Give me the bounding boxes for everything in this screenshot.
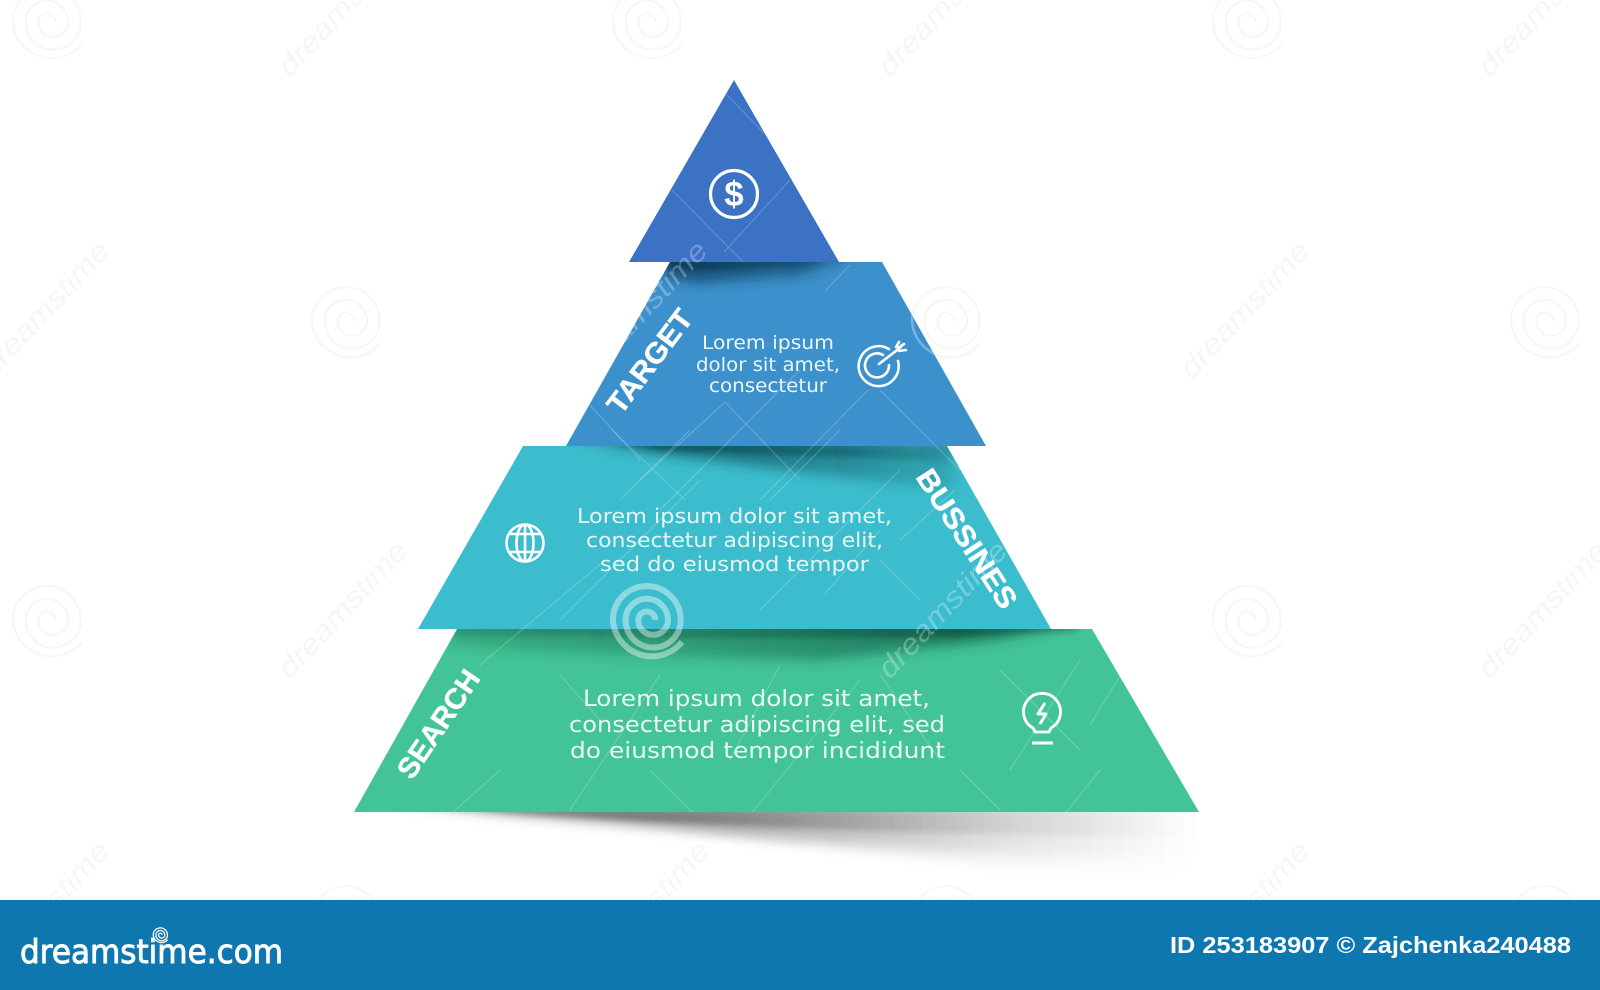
pyramid drop shadow: [420, 812, 1164, 862]
footer band: [0, 900, 1600, 990]
watermark overlay on pyramid: [450, 95, 1145, 820]
text: search tier copy: do eiusmod tempor incididunt: [570, 739, 945, 764]
watermark text: dreamstime: [272, 535, 414, 685]
panel: target tier: [566, 258, 986, 446]
label: bussines: BUSSINES: [909, 463, 1023, 615]
watermark text: dreamstime: [1174, 235, 1316, 385]
text: target tier copy: Lorem ipsum: [702, 332, 834, 354]
icon: dollar: [710, 170, 758, 218]
watermark overlay on pyramid: dreamstime: [872, 535, 1014, 685]
icon: target: [859, 342, 906, 386]
icon: globe: [506, 524, 544, 562]
watermark text: dreamstime: [1174, 835, 1316, 985]
text: target tier copy: dolor sit amet,: [696, 354, 840, 376]
watermark text: dreamstime: [1472, 535, 1600, 685]
watermark: central spiral: [613, 586, 682, 656]
text: business tier copy: sed do eiusmod tempor: [600, 552, 870, 576]
watermark overlay on pyramid: dreamstime: [572, 235, 714, 385]
text: target tier copy: [696, 332, 840, 397]
text: business tier copy: [577, 504, 892, 576]
text: search tier copy: consectetur adipiscing elit, sed: [569, 713, 945, 738]
watermark text: dreamstime: [574, 835, 716, 985]
footer credit: ID 253183907 © Zajchenka240488: [1170, 932, 1571, 958]
panel: top triangle: [629, 80, 839, 262]
text: target tier copy: consectetur: [709, 375, 827, 397]
text: business tier copy: Lorem ipsum dolor sit amet,: [577, 504, 892, 528]
label: search: SEARCH: [391, 664, 487, 785]
icon: light bulb: [1024, 693, 1061, 743]
text: business tier copy: consectetur adipiscing elit,: [586, 528, 883, 552]
footer logo: dreamstime.com: [20, 932, 283, 971]
label: target: TARGET: [601, 303, 700, 420]
text: search tier copy: Lorem ipsum dolor sit amet,: [583, 687, 930, 712]
text: search tier copy: [569, 687, 945, 764]
icon: dollar: $: [724, 175, 744, 214]
panel: search tier: [354, 624, 1199, 812]
panel: business tier: [418, 442, 1051, 629]
